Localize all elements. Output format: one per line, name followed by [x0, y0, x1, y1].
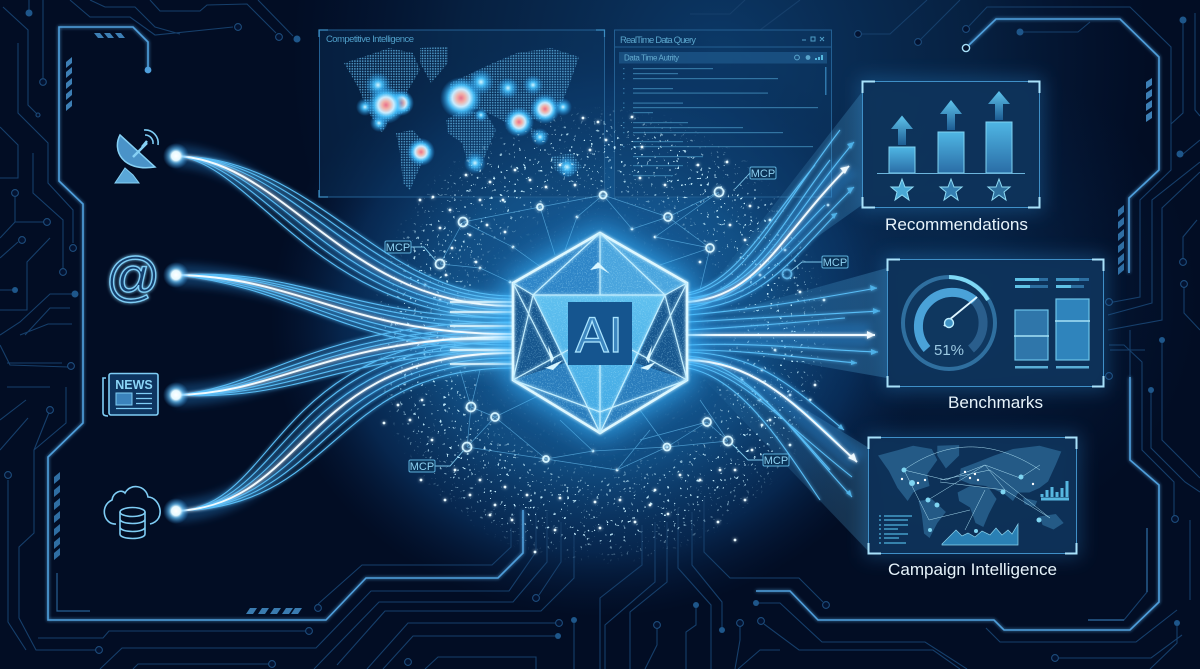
label: MCP lower right: MCP [764, 455, 788, 467]
label: MCP top right: MCP [751, 168, 775, 180]
AI box [568, 302, 632, 365]
network lines and MCP nodes [385, 167, 848, 473]
panel: campaign intelligence [864, 433, 1081, 558]
bright sparkles [384, 117, 828, 552]
icon: cloud database [104, 487, 160, 538]
right output beams [690, 92, 887, 552]
legend list [879, 516, 912, 543]
mini bar chart [1041, 481, 1069, 499]
icosahedron facets [513, 233, 687, 433]
label: MCP lower left: MCP [410, 461, 434, 473]
panel: competitive intelligence map [319, 30, 604, 197]
world network map [878, 445, 1064, 538]
heading: realtime data query: RealTime Data Query [620, 35, 696, 46]
panel: realtime data query [614, 30, 832, 197]
AI text: AI [575, 307, 623, 363]
crystal inner edges [513, 233, 687, 433]
label: MCP right: MCP [823, 257, 847, 269]
mini bars [1014, 278, 1090, 368]
sub header bar [619, 52, 827, 64]
label: recommendations: Recommendations [885, 215, 1028, 234]
gauge [903, 277, 995, 369]
gauge value: 51% [934, 342, 964, 359]
circuit frame: left [48, 27, 523, 620]
stars [891, 179, 1010, 200]
icon: news: NEWS [115, 378, 153, 392]
output strands and arrows [688, 130, 880, 500]
input fiber strands [163, 143, 515, 524]
bar chart with arrows [877, 91, 1025, 174]
circuit frame: right [756, 19, 1159, 630]
label: MCP upper left: MCP [386, 242, 410, 254]
area chart [942, 524, 1018, 545]
source node: news [163, 382, 189, 408]
icon: news [103, 374, 158, 416]
icon: satellite dish [115, 130, 158, 183]
panel: recommendations [858, 77, 1044, 212]
core glow [506, 226, 694, 440]
heat spots [356, 69, 578, 178]
crystal speckle [513, 233, 687, 433]
source node: database [163, 498, 189, 524]
dotted world map [344, 47, 582, 190]
label: benchmarks: Benchmarks [948, 393, 1043, 412]
heading: competitive intelligence: Competitive Intelligence [326, 34, 414, 45]
icon: at sign: @ [106, 247, 160, 307]
particle ring [374, 107, 832, 564]
source node: email [163, 262, 189, 288]
label: campaign intelligence: Campaign Intelligence [888, 560, 1057, 579]
panel: benchmarks [883, 255, 1108, 391]
sub header text: Data Time Autrity [624, 54, 679, 62]
crystal core [506, 226, 694, 440]
source node: satellite [163, 143, 189, 169]
code lines [623, 68, 818, 176]
